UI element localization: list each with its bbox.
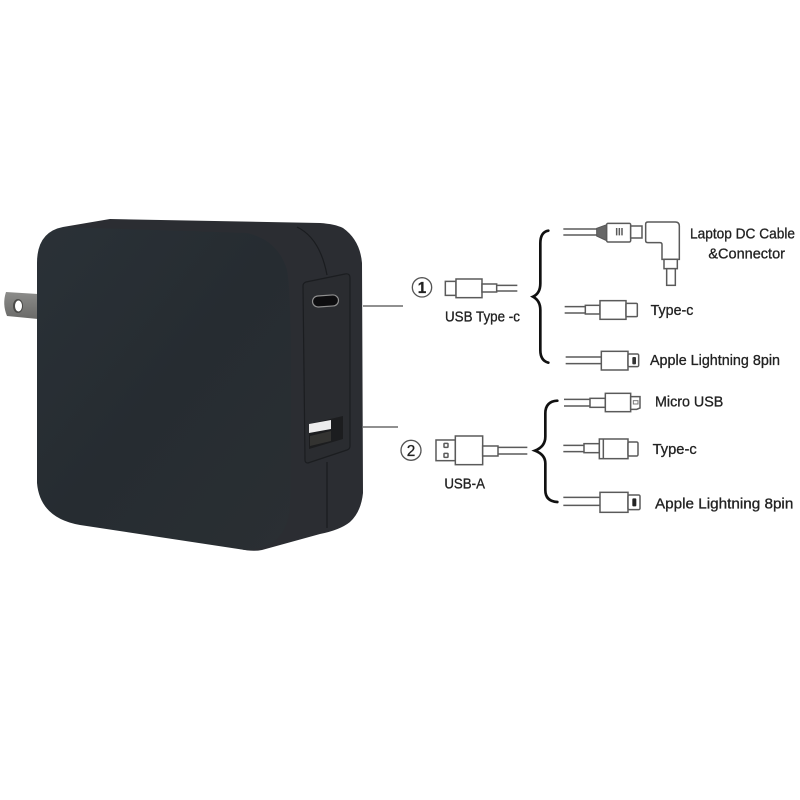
- label: Laptop DC Cable &Connector: Laptop DC Cable: [690, 226, 795, 242]
- label: Micro USB: Micro USB: [655, 395, 723, 411]
- icon: Micro USB cable: [564, 393, 640, 412]
- number badge 2: [401, 440, 421, 460]
- label: Apple Lightning 8pin: Apple Lightning 8pin: [650, 353, 780, 369]
- label: Type-c: Type-c: [651, 303, 693, 319]
- leader line to USB-A: [363, 426, 398, 428]
- icon: Apple Lightning cable: [563, 492, 640, 512]
- brace: [533, 231, 548, 363]
- number badge 1: 1: [418, 280, 427, 297]
- number badge 1: [412, 278, 432, 297]
- body seams: [297, 227, 327, 528]
- label: Apple Lightning 8pin: Apple Lightning 8pin: [655, 496, 793, 512]
- USB-A port: [309, 416, 343, 449]
- brace: [535, 401, 557, 502]
- icon: plug prong: [4, 292, 38, 319]
- icon: Apple Lightning cable: [566, 351, 639, 370]
- charger back body: [63, 219, 363, 551]
- label: Type-c: Type-c: [653, 442, 697, 458]
- icon: USB-A source cable: [436, 436, 527, 465]
- label: USB Type -c: USB Type -c: [445, 310, 520, 326]
- port panel: [303, 274, 350, 463]
- group: USB-A outputs: [401, 393, 793, 512]
- USB-C port: [312, 295, 339, 307]
- group: USB Type-C outputs: [412, 222, 795, 370]
- label: Laptop DC Cable &Connector: &Connector: [708, 246, 785, 262]
- charger: [4, 219, 363, 551]
- icon: Type-c cable: [563, 439, 638, 459]
- icon: Type-c cable: [565, 301, 637, 319]
- leader line to USB-C: [363, 305, 403, 307]
- icon: laptop DC cable and connector: [563, 222, 679, 285]
- label: Laptop DC Cable &Connector: [690, 226, 795, 262]
- charger front face: [37, 227, 291, 550]
- number badge 2: 2: [407, 443, 415, 460]
- label: USB-A: USB-A: [444, 476, 485, 492]
- icon: USB-C source cable: [445, 279, 517, 298]
